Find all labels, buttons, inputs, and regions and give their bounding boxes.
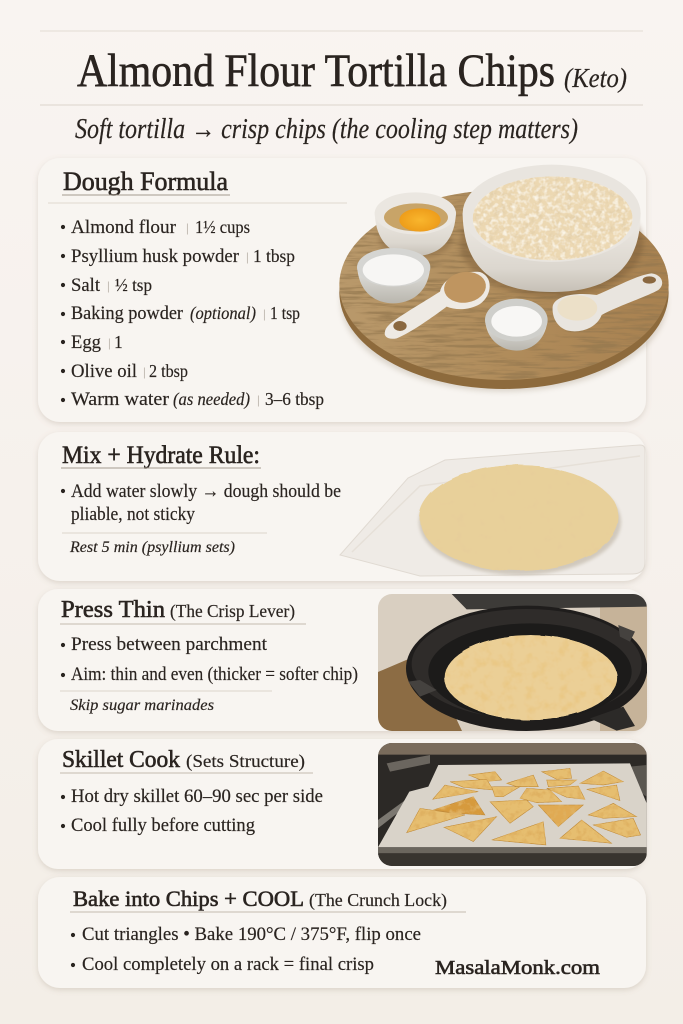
bake instructions <box>71 924 421 975</box>
image: tortilla in cast iron skillet <box>378 594 647 731</box>
panel: dough formula <box>38 158 669 422</box>
ingredient list: Salt <box>71 275 101 296</box>
glass bowl: salt <box>357 248 430 303</box>
glass bowl: baking powder <box>485 299 548 351</box>
skillet instructions: Cool fully before cutting <box>71 815 255 836</box>
ingredient list: 1 tsp <box>270 303 300 323</box>
heading: bake into chips + cool: (The Crunch Lock) <box>309 890 447 911</box>
panel: press thin <box>38 589 647 731</box>
hydration instruction <box>61 481 341 525</box>
panel: mix + hydrate <box>38 432 646 581</box>
wooden board <box>339 190 669 389</box>
heading: bake into chips + cool <box>70 886 466 912</box>
heading: press thin: Press Thin <box>61 597 165 623</box>
image: tortilla on parchment <box>340 445 645 576</box>
press instructions <box>61 634 358 685</box>
bake instructions: Cool completely on a rack = final crisp <box>82 954 374 975</box>
heading: skillet cook: Skillet Cook <box>62 747 180 773</box>
ingredient list: | <box>186 220 189 235</box>
ingredient list: | <box>143 364 146 379</box>
heading: press thin <box>60 597 306 624</box>
skillet instructions: Hot dry skillet 60–90 sec per side <box>71 786 323 807</box>
image: chips baking in oven <box>378 743 647 866</box>
press instructions: Aim: thin and even (thicker = softer chip) <box>71 664 358 685</box>
chips <box>407 768 641 845</box>
title: Almond Flour Tortilla Chips <box>77 45 555 97</box>
title: (Keto) <box>564 63 627 93</box>
brand: MasalaMonk.com: MasalaMonk.com <box>435 957 600 979</box>
heading: dough formula: Dough Formula <box>63 167 228 196</box>
press instructions: Press between parchment <box>71 634 268 655</box>
panel: skillet cook <box>38 739 647 869</box>
parchment sheet <box>378 763 647 847</box>
image: ingredients on wooden board <box>339 165 669 392</box>
ingredient list: 1 tbsp <box>253 246 295 266</box>
bake instructions: Cut triangles • Bake 190°C / 375°F, flip once <box>82 924 421 945</box>
measuring spoon: psyllium <box>385 269 490 339</box>
ingredient list: (optional) <box>190 303 256 323</box>
ingredient list: (as needed) <box>173 389 250 409</box>
panel: bake into chips <box>38 877 646 988</box>
ingredient list: Egg <box>71 332 101 353</box>
ingredient list: 1 <box>114 332 123 352</box>
heading: press thin: (The Crisp Lever) <box>170 601 295 622</box>
ingredient list: | <box>108 335 111 350</box>
ingredient list: | <box>263 306 266 321</box>
ingredient list: ½ tsp <box>115 275 152 295</box>
egg bowl <box>375 192 456 258</box>
ingredient list: | <box>107 278 110 293</box>
subtitle: Soft tortilla → crisp chips (the cooling step matters) <box>75 114 578 145</box>
ingredient list: 2 tbsp <box>149 361 188 381</box>
hydration instruction: Add water slowly → dough should be <box>71 481 341 502</box>
rest note: Rest 5 min (psyllium sets) <box>69 539 235 556</box>
skillet instructions <box>61 786 323 836</box>
skip sugar note: Skip sugar marinades <box>70 697 214 714</box>
ingredient list: | <box>246 249 249 264</box>
ingredient list <box>61 217 324 410</box>
ingredient list: Warm water <box>71 389 170 410</box>
header <box>40 31 643 145</box>
heading: mix + hydrate rule: Mix + Hydrate Rule: <box>62 442 260 469</box>
flour bowl <box>460 165 643 297</box>
ingredient list: Almond flour <box>71 217 177 238</box>
heading: bake into chips + cool: Bake into Chips + COOL <box>73 886 304 911</box>
ingredient list: 1½ cups <box>195 217 250 237</box>
ingredient list: Olive oil <box>71 361 137 382</box>
hydration instruction: pliable, not sticky <box>71 504 195 525</box>
heading: skillet cook <box>60 747 313 773</box>
ingredient list: Baking powder <box>71 303 184 324</box>
ingredient list: 3–6 tbsp <box>265 389 324 409</box>
ingredient list: Psyllium husk powder <box>71 246 240 267</box>
ingredient list: | <box>257 392 260 407</box>
measuring spoon: almond meal <box>553 273 662 331</box>
heading: skillet cook: (Sets Structure) <box>186 751 305 772</box>
